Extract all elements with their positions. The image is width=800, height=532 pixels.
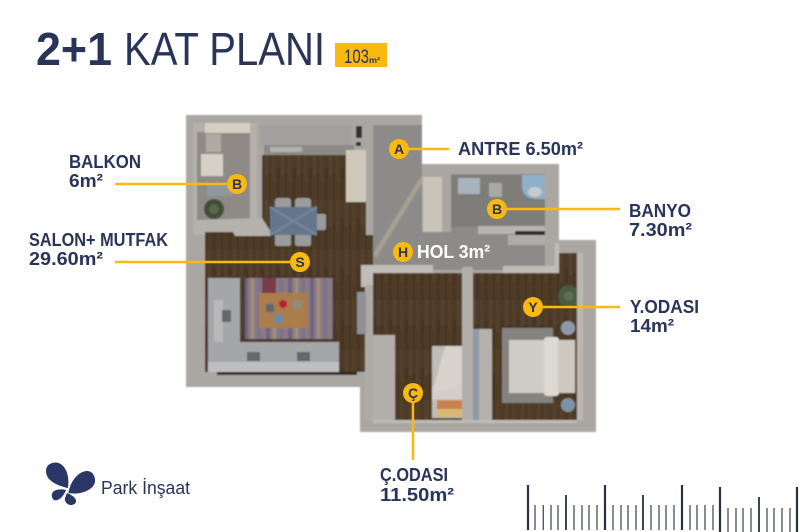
callout: yatak odasi: 14m² [630, 315, 674, 336]
title: 2+1 [36, 23, 112, 75]
callout: salon mutfak: SALON+ MUTFAK [29, 229, 169, 250]
area badge: m² [369, 56, 380, 65]
callout: banyo: 7.30m² [629, 219, 692, 240]
callout: salon mutfak: S [295, 254, 305, 270]
floor plan [186, 115, 596, 432]
bedroom floors [373, 273, 462, 420]
callout: banyo: BANYO [629, 200, 691, 221]
callout: antre: A [394, 141, 404, 157]
callout: cocuk odasi: Ç.ODASI [380, 464, 448, 485]
callout: balkon: BALKON [69, 151, 141, 172]
icon: butterfly [46, 462, 95, 505]
bathroom [422, 164, 559, 249]
area badge [335, 43, 387, 68]
child bedroom furniture [373, 335, 462, 420]
callout: balkon: 6m² [69, 170, 103, 191]
wall between balcony and salon [197, 218, 271, 236]
balcony floor [193, 123, 257, 235]
kitchen counter [260, 125, 366, 202]
callout: salon mutfak [29, 229, 310, 272]
callout: salon mutfak: 29.60m² [29, 248, 103, 269]
logo: Park Insaat: Park İnşaat [101, 478, 190, 498]
master bedroom furniture [473, 253, 583, 420]
scale ruler [528, 485, 797, 532]
callout: balkon: B [232, 176, 242, 192]
logo: Park Insaat [46, 462, 190, 505]
dining table [270, 198, 326, 246]
callout: cocuk odasi: 11.50m² [380, 484, 454, 505]
bottom wall bands [373, 420, 577, 423]
outer walls [186, 115, 596, 432]
area badge: 103 [344, 47, 369, 68]
hall walls [361, 243, 559, 420]
callout: balkon [69, 151, 247, 194]
callout: hol: H [398, 244, 408, 260]
callout: hol: HOL 3m² [417, 241, 490, 262]
title [36, 23, 325, 75]
callout: yatak odasi [523, 296, 699, 336]
salon and kitchen wood floor [205, 155, 373, 372]
callout: yatak odasi: Y [528, 299, 538, 315]
callout: banyo [487, 199, 692, 240]
sofa and rug [208, 278, 366, 375]
callout: antre [389, 138, 583, 159]
callout: banyo: B [492, 201, 502, 217]
callout: cocuk odasi: Ç [408, 385, 418, 401]
callout: cocuk odasi [380, 383, 454, 505]
callout: yatak odasi: Y.ODASI [630, 296, 699, 317]
title: KAT PLANI [124, 23, 325, 75]
callout: antre: ANTRE 6.50m² [458, 138, 583, 159]
entry and hall floor [373, 125, 545, 270]
